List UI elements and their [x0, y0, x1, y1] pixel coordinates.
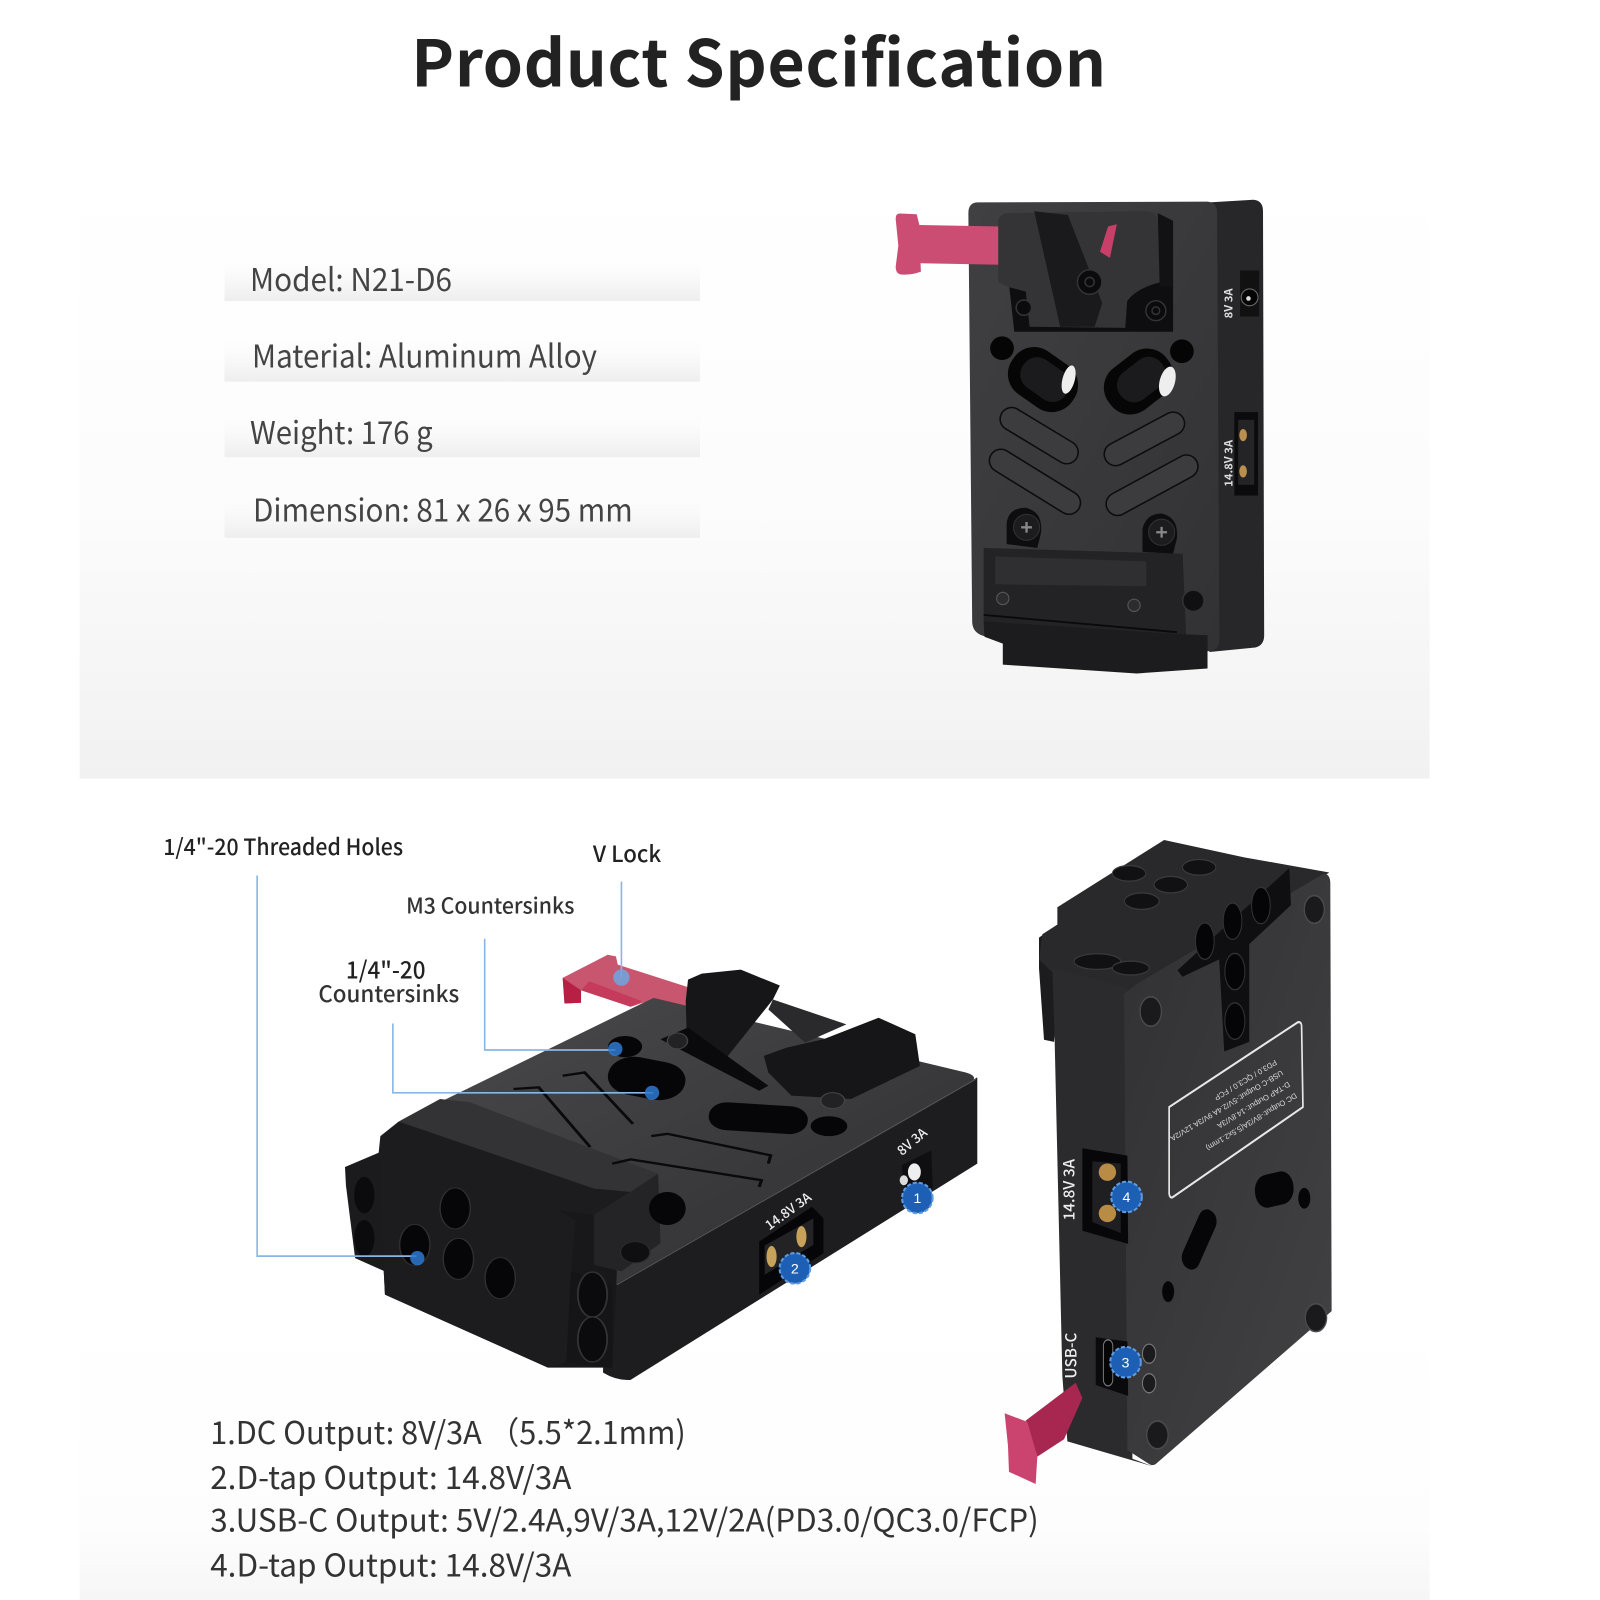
v-lock plate	[998, 211, 1162, 328]
side wall	[1209, 200, 1264, 652]
v-lock wedge	[1034, 211, 1102, 327]
rear label text	[1162, 1058, 1298, 1166]
title: Product Specification	[411, 12, 1106, 106]
number badge 1	[902, 1183, 933, 1213]
round holes	[990, 336, 1014, 360]
rear label text: PD3.0 / QC3.0 / FCP	[1213, 1058, 1278, 1102]
mount plate	[378, 1155, 576, 1368]
callout lines	[257, 876, 653, 1256]
mounting screws	[1007, 508, 1177, 554]
output list	[210, 1408, 1039, 1587]
top plate grooves	[514, 1072, 771, 1187]
print: 14.8V 3A: 14.8V 3A	[761, 1187, 815, 1234]
corner screws	[1140, 896, 1327, 1449]
bottom rail	[984, 548, 1208, 673]
v-lock recess	[1009, 280, 1173, 332]
output 1: 1.DC Output: 8V/3A （5.5*2.1mm)	[210, 1408, 686, 1454]
spec label outline	[1169, 1022, 1303, 1198]
callout label: 1/4"-20 countersinks: 1/4"-20	[346, 952, 426, 986]
rear label text: USB-C Output:-5V/2.4A 9V/3A 12V/2A	[1168, 1068, 1285, 1143]
spec row: model: Model: N21-D6	[250, 255, 452, 301]
spec list	[224, 255, 700, 538]
v-lock screws	[667, 1033, 845, 1109]
number badge 3	[1110, 1347, 1141, 1378]
8V port	[900, 1150, 933, 1205]
number badge 1: 1	[913, 1191, 921, 1207]
output 3: 3.USB-C Output: 5V/2.4A,9V/3A,12V/2A(PD3.0/QC3.0/FCP)	[210, 1496, 1039, 1542]
rear label text: D-TAP Output:-14.8V/3A	[1215, 1080, 1292, 1131]
print: 14.8V 3A rear: 14.8V 3A	[1057, 1158, 1079, 1220]
print: USB-C: USB-C	[1060, 1333, 1082, 1379]
side screws	[354, 1177, 650, 1368]
callout label: 1/4"-20 countersinks: Countersinks	[318, 977, 459, 1009]
callout dots	[410, 969, 659, 1265]
product photo: front view	[896, 200, 1264, 673]
holes on top	[1074, 859, 1216, 975]
top surface	[1039, 840, 1329, 994]
callout label: V Lock: V Lock	[592, 837, 661, 869]
D-tap port	[759, 1207, 823, 1295]
oval slots	[998, 337, 1183, 424]
release handle	[1005, 1383, 1082, 1484]
side print: 14.8V 3A: 14.8V 3A	[1221, 439, 1237, 487]
spec row: dimension: Dimension: 81 x 26 x 95 mm	[253, 485, 633, 531]
D-tap port	[1234, 412, 1258, 496]
rear label text: DC Output:-8V/3A(5.5x2.1mm)	[1204, 1091, 1298, 1153]
D-tap port	[1082, 1148, 1128, 1244]
spec row: weight: Weight: 176 g	[250, 408, 433, 454]
threaded holes	[400, 1188, 515, 1299]
v-lock claws	[660, 970, 920, 1099]
base behind mount	[378, 1159, 617, 1368]
top surface	[399, 998, 974, 1286]
wall edge highlight	[617, 1079, 976, 1285]
print: 8V 3A: 8V 3A	[892, 1122, 931, 1159]
top plate holes	[602, 1036, 847, 1225]
red marker	[1100, 224, 1117, 258]
threaded holes on block	[1195, 887, 1270, 1039]
callout label: threaded holes: 1/4"-20 Threaded Holes	[163, 830, 403, 862]
side print: 8V 3A: 8V 3A	[1221, 288, 1237, 318]
release handle	[896, 213, 1001, 275]
output 2: 2.D-tap Output: 14.8V/3A	[210, 1453, 572, 1499]
face slots	[1162, 1169, 1310, 1302]
USB-C port	[1096, 1337, 1156, 1396]
number badge 2	[780, 1253, 810, 1284]
spec row: weight	[224, 408, 700, 457]
screws in v-lock	[1016, 270, 1166, 321]
number badge 4	[1111, 1182, 1142, 1212]
panel: product overview background	[80, 173, 1430, 779]
right wall	[603, 1077, 977, 1380]
rear rail block	[1039, 925, 1061, 1042]
output 4: 4.D-tap Output: 14.8V/3A	[210, 1541, 572, 1587]
spec row: material: Material: Aluminum Alloy	[252, 331, 597, 377]
product photo: angled view with callouts	[345, 955, 977, 1380]
product photo: rear side view	[1005, 840, 1332, 1484]
spec row: model	[224, 255, 700, 301]
panel: output list background	[80, 1316, 1430, 1600]
number badge 3: 3	[1122, 1355, 1130, 1371]
T block	[1177, 868, 1291, 1051]
number badge 2: 2	[791, 1261, 799, 1277]
v-lock raised plate	[768, 999, 846, 1043]
rail end	[594, 1174, 660, 1271]
chevron grooves	[1001, 419, 1186, 504]
side wall	[1052, 968, 1152, 1466]
front plate	[968, 202, 1219, 651]
callout label: M3 countersinks: M3 Countersinks	[406, 889, 574, 920]
DC port	[1240, 271, 1259, 316]
callout label: 1/4"-20 countersinks	[318, 952, 459, 1009]
number badge 4: 4	[1123, 1190, 1131, 1206]
rail front	[378, 1122, 631, 1220]
rail top	[399, 1099, 658, 1192]
release handle	[563, 955, 690, 1009]
left side block	[345, 1152, 385, 1271]
rear face	[1124, 873, 1332, 1465]
